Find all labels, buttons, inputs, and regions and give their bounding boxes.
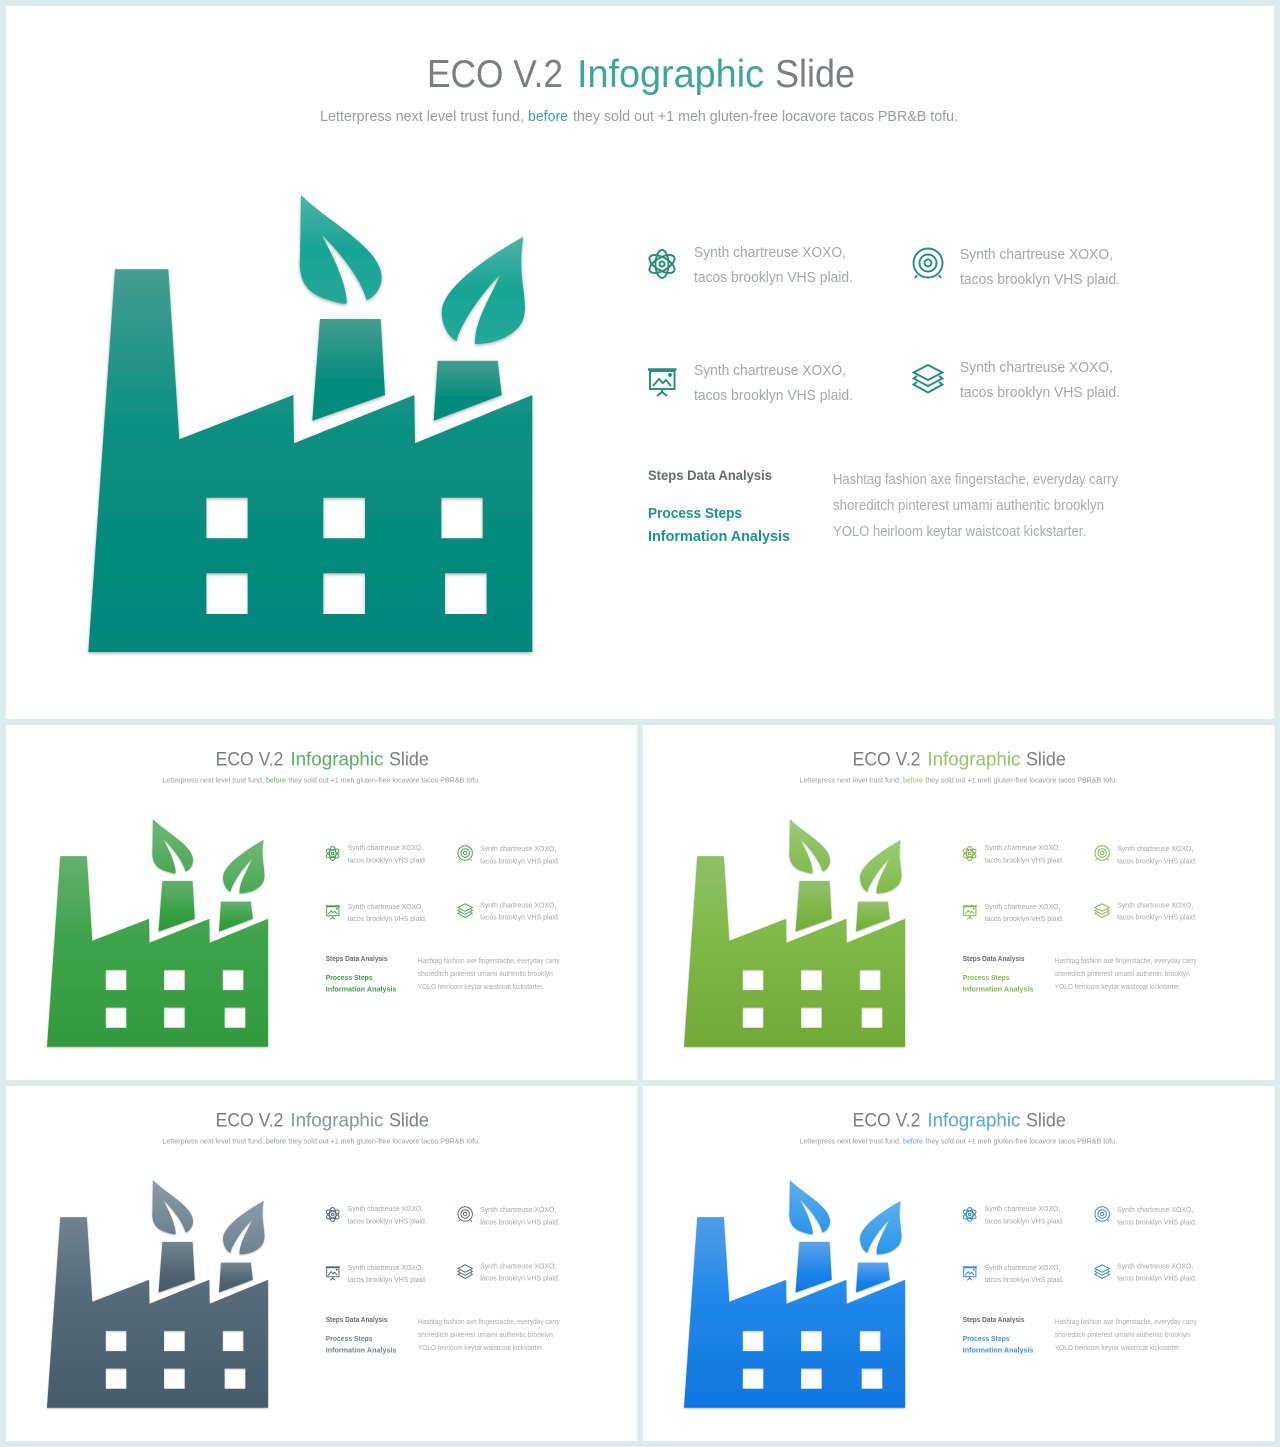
text: item three xyxy=(694,362,853,404)
text: item four xyxy=(480,900,560,922)
text: item one: Synth chartreuse XOXO, xyxy=(348,1204,423,1213)
text: item one xyxy=(985,843,1064,864)
title: Infographic xyxy=(927,748,1021,770)
title: Infographic xyxy=(927,1109,1021,1131)
text: item four xyxy=(960,359,1120,401)
icon: target xyxy=(1095,1207,1109,1221)
text: item three: Synth chartreuse XOXO, xyxy=(985,902,1060,911)
text: item three: tacos brooklyn VHS plaid. xyxy=(694,387,853,404)
icon: presentation board xyxy=(326,906,340,919)
text: item two: tacos brooklyn VHS plaid. xyxy=(1117,856,1197,865)
text: item three: Synth chartreuse XOXO, xyxy=(694,362,846,379)
panel: slate slide xyxy=(6,1086,637,1441)
subtitle xyxy=(320,108,958,125)
text: item two: Synth chartreuse XOXO, xyxy=(960,246,1113,263)
title: ECO V.2 xyxy=(427,53,563,96)
text: item four: Synth chartreuse XOXO, xyxy=(1117,1261,1193,1270)
heading: process steps: Information Analysis xyxy=(963,1345,1033,1354)
heading: process steps: Process Steps xyxy=(326,973,373,982)
text: item one xyxy=(694,244,853,286)
title xyxy=(853,1109,1066,1131)
icon: atom xyxy=(325,1208,340,1221)
paragraph: shoreditch pinterest umami authentic brooklyn xyxy=(1055,969,1190,978)
icon: target xyxy=(458,846,472,860)
text: item one: Synth chartreuse XOXO, xyxy=(985,1204,1060,1213)
paragraph: shoreditch pinterest umami authentic brooklyn xyxy=(418,1330,553,1339)
paragraph: YOLO heirloom keytar waistcoat kickstarter. xyxy=(418,1343,544,1352)
text: item four: Synth chartreuse XOXO, xyxy=(480,1261,556,1270)
icon: atom xyxy=(962,847,977,860)
panel: lime slide xyxy=(643,725,1274,1080)
paragraph: shoreditch pinterest umami authentic brooklyn xyxy=(833,498,1104,514)
icon: target xyxy=(1095,846,1109,860)
icon: factory with leaves xyxy=(88,195,532,652)
subtitle xyxy=(162,1136,480,1145)
text: item four: tacos brooklyn VHS plaid. xyxy=(1117,913,1197,922)
panel: blue slide xyxy=(643,1086,1274,1441)
subtitle: before xyxy=(266,775,286,784)
icon: layers xyxy=(458,904,472,917)
heading: process steps xyxy=(963,973,1033,993)
text: item three: Synth chartreuse XOXO, xyxy=(348,902,423,911)
subtitle: they sold out +1 meh gluten-free locavore tacos PBR&B tofu. xyxy=(925,1136,1117,1145)
text: item four: Synth chartreuse XOXO, xyxy=(960,359,1113,376)
heading: process steps xyxy=(326,1334,396,1354)
heading: process steps: Information Analysis xyxy=(326,984,396,993)
text: item one: tacos brooklyn VHS plaid. xyxy=(348,855,427,864)
text: item three: tacos brooklyn VHS plaid. xyxy=(985,1275,1064,1284)
subtitle: they sold out +1 meh gluten-free locavore tacos PBR&B tofu. xyxy=(288,775,480,784)
subtitle: Letterpress next level trust fund, xyxy=(162,1136,264,1145)
text: item three: tacos brooklyn VHS plaid. xyxy=(985,914,1064,923)
subtitle xyxy=(162,775,480,784)
title: Slide xyxy=(389,748,429,770)
text: item one: tacos brooklyn VHS plaid. xyxy=(348,1216,427,1225)
paragraph: Hashtag fashion axe fingerstache, everyday carry xyxy=(418,956,560,965)
text: item four: Synth chartreuse XOXO, xyxy=(1117,900,1193,909)
text: item two: Synth chartreuse XOXO, xyxy=(1117,844,1193,853)
icon: factory with leaves xyxy=(47,819,268,1047)
title: ECO V.2 xyxy=(216,1109,283,1131)
paragraph: Hashtag fashion axe fingerstache, everyday carry xyxy=(1055,956,1197,965)
text: item three xyxy=(348,1263,427,1284)
title: Slide xyxy=(389,1109,429,1131)
title: Infographic xyxy=(290,748,384,770)
text: item four xyxy=(1117,900,1197,922)
subtitle: Letterpress next level trust fund, xyxy=(799,1136,901,1145)
subtitle: before xyxy=(903,1136,923,1145)
icon: target xyxy=(458,1207,472,1221)
text: item two xyxy=(1117,844,1197,865)
title: ECO V.2 xyxy=(853,1109,920,1131)
text: item one: tacos brooklyn VHS plaid. xyxy=(694,269,853,286)
heading: process steps: Process Steps xyxy=(648,505,742,522)
icon: presentation board xyxy=(326,1267,340,1280)
text: item three xyxy=(348,902,427,923)
text: item three: Synth chartreuse XOXO, xyxy=(985,1263,1060,1272)
subtitle: they sold out +1 meh gluten-free locavore tacos PBR&B tofu. xyxy=(573,108,958,125)
icon: target xyxy=(914,248,942,278)
subtitle: before xyxy=(528,108,568,125)
paragraph: Hashtag fashion axe fingerstache, everyday carry xyxy=(418,1317,560,1326)
title xyxy=(216,748,429,770)
icon: presentation board xyxy=(963,1267,977,1280)
subtitle: Letterpress next level trust fund, xyxy=(799,775,901,784)
heading: steps data analysis: Steps Data Analysis xyxy=(326,1317,388,1324)
text: item four: tacos brooklyn VHS plaid. xyxy=(1117,1274,1197,1283)
heading: process steps: Process Steps xyxy=(326,1334,373,1343)
text: item two: tacos brooklyn VHS plaid. xyxy=(480,1217,560,1226)
subtitle: they sold out +1 meh gluten-free locavore tacos PBR&B tofu. xyxy=(925,775,1117,784)
title xyxy=(427,53,855,96)
heading: steps data analysis: Steps Data Analysis xyxy=(963,956,1025,963)
text: item four xyxy=(480,1261,560,1283)
text: item three: Synth chartreuse XOXO, xyxy=(348,1263,423,1272)
text: item four: tacos brooklyn VHS plaid. xyxy=(480,1274,560,1283)
heading: steps data analysis: Steps Data Analysis xyxy=(963,1317,1025,1324)
heading: process steps xyxy=(648,505,790,545)
paragraph xyxy=(1055,1317,1197,1352)
subtitle: Letterpress next level trust fund, xyxy=(162,775,264,784)
text: item three xyxy=(985,1263,1064,1284)
icon: presentation board xyxy=(648,370,676,396)
text: item one: Synth chartreuse XOXO, xyxy=(694,244,846,261)
text: item one xyxy=(348,843,427,864)
icon: atom xyxy=(325,847,340,860)
paragraph xyxy=(833,472,1119,540)
paragraph xyxy=(418,956,560,991)
icon: atom xyxy=(962,1208,977,1221)
paragraph: YOLO heirloom keytar waistcoat kickstarter. xyxy=(1055,982,1181,991)
paragraph: shoreditch pinterest umami authentic brooklyn xyxy=(418,969,553,978)
heading: process steps: Information Analysis xyxy=(326,1345,396,1354)
text: item four: Synth chartreuse XOXO, xyxy=(480,900,556,909)
text: item four xyxy=(1117,1261,1197,1283)
text: item four: tacos brooklyn VHS plaid. xyxy=(960,384,1120,401)
text: item one: Synth chartreuse XOXO, xyxy=(348,843,423,852)
subtitle xyxy=(799,1136,1117,1145)
icon: factory with leaves xyxy=(684,1180,905,1408)
paragraph: YOLO heirloom keytar waistcoat kickstarter. xyxy=(1055,1343,1181,1352)
subtitle: before xyxy=(266,1136,286,1145)
text: item two: Synth chartreuse XOXO, xyxy=(1117,1205,1193,1214)
heading: process steps: Process Steps xyxy=(963,1334,1010,1343)
title: Infographic xyxy=(577,53,764,96)
text: item two: Synth chartreuse XOXO, xyxy=(480,1205,556,1214)
heading: process steps: Process Steps xyxy=(963,973,1010,982)
paragraph: Hashtag fashion axe fingerstache, everyday carry xyxy=(1055,1317,1197,1326)
text: item three xyxy=(985,902,1064,923)
text: item two: tacos brooklyn VHS plaid. xyxy=(1117,1217,1197,1226)
subtitle: before xyxy=(903,775,923,784)
icon: atom xyxy=(647,250,677,278)
text: item two xyxy=(480,844,560,865)
heading: process steps: Information Analysis xyxy=(648,528,790,545)
paragraph: YOLO heirloom keytar waistcoat kickstarter. xyxy=(418,982,544,991)
icon: layers xyxy=(914,365,942,392)
title: Slide xyxy=(775,53,855,96)
paragraph: Hashtag fashion axe fingerstache, everyday carry xyxy=(833,472,1119,488)
heading: steps data analysis: Steps Data Analysis xyxy=(326,956,388,963)
paragraph xyxy=(418,1317,560,1352)
title: Infographic xyxy=(290,1109,384,1131)
text: item two xyxy=(480,1205,560,1226)
heading: process steps: Information Analysis xyxy=(963,984,1033,993)
title: ECO V.2 xyxy=(216,748,283,770)
text: item three: tacos brooklyn VHS plaid. xyxy=(348,914,427,923)
text: item two: tacos brooklyn VHS plaid. xyxy=(480,856,560,865)
title: Slide xyxy=(1026,748,1066,770)
icon: presentation board xyxy=(963,906,977,919)
text: item four: tacos brooklyn VHS plaid. xyxy=(480,913,560,922)
title: ECO V.2 xyxy=(853,748,920,770)
icon: factory with leaves xyxy=(47,1180,268,1408)
text: item one: tacos brooklyn VHS plaid. xyxy=(985,855,1064,864)
text: item one: Synth chartreuse XOXO, xyxy=(985,843,1060,852)
panel: green slide xyxy=(6,725,637,1080)
text: item two: Synth chartreuse XOXO, xyxy=(480,844,556,853)
text: item two: tacos brooklyn VHS plaid. xyxy=(960,271,1120,288)
icon: layers xyxy=(458,1265,472,1278)
icon: factory with leaves xyxy=(684,819,905,1047)
text: item one xyxy=(348,1204,427,1225)
text: item one: tacos brooklyn VHS plaid. xyxy=(985,1216,1064,1225)
text: item two xyxy=(1117,1205,1197,1226)
paragraph xyxy=(1055,956,1197,991)
heading: process steps xyxy=(326,973,396,993)
subtitle: Letterpress next level trust fund, xyxy=(320,108,524,125)
paragraph: YOLO heirloom keytar waistcoat kickstarter. xyxy=(833,524,1086,540)
icon: layers xyxy=(1095,904,1109,917)
panel: teal main slide xyxy=(6,6,1274,719)
paragraph: shoreditch pinterest umami authentic brooklyn xyxy=(1055,1330,1190,1339)
title xyxy=(853,748,1066,770)
title xyxy=(216,1109,429,1131)
heading: steps data analysis: Steps Data Analysis xyxy=(648,467,772,483)
icon: layers xyxy=(1095,1265,1109,1278)
subtitle xyxy=(799,775,1117,784)
heading: process steps xyxy=(963,1334,1033,1354)
text: item three: tacos brooklyn VHS plaid. xyxy=(348,1275,427,1284)
text: item one xyxy=(985,1204,1064,1225)
subtitle: they sold out +1 meh gluten-free locavore tacos PBR&B tofu. xyxy=(288,1136,480,1145)
title: Slide xyxy=(1026,1109,1066,1131)
text: item two xyxy=(960,246,1120,288)
